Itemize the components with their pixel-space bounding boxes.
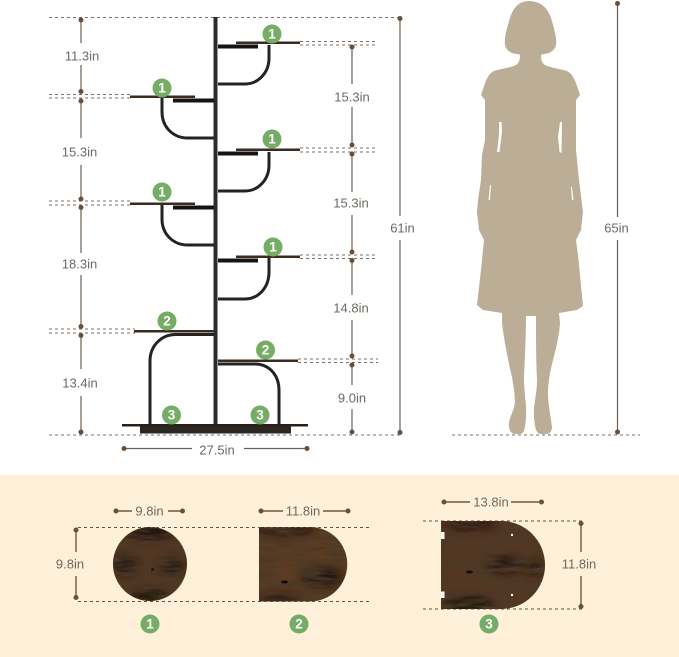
badges: stand part numbers: 3 [168,408,176,422]
dimensions: left column: 15.3in [62,144,97,160]
panel: shelf 3 base [441,494,596,634]
base shelf [122,424,308,434]
dimensions: left column [62,18,99,434]
dimension: 9.8in width: 9.8in [135,504,164,518]
badges: stand part numbers: 2 [262,342,269,358]
dimensions: right column: 9.0in [338,390,366,406]
shelf: tier 2 left [130,96,214,138]
dimension: 13.8in: 13.8in [473,494,509,510]
dimension: total height 61in: 61in [390,220,415,236]
badge 1: 1 [146,616,154,632]
dimension: 13.8in [442,494,544,510]
chart: plant stand [122,17,308,434]
dimension: total width 27.5in: 27.5in [199,442,235,458]
dimensions: left column: 18.3in [62,256,97,272]
badges: stand part numbers [152,24,282,424]
shelf: tier 5 right [218,256,300,299]
shelf: tier 3 right [218,148,300,191]
panel: shelf 2 rounded top [255,504,351,634]
badge 3 [480,614,498,634]
dimension: total height 61in [390,16,415,435]
dimensions: right column [333,44,370,434]
dimension: 9.800in height: 9.8in [56,556,84,572]
badges: stand part numbers: 3 [256,408,264,422]
dimensions: right column: 14.8in [333,300,369,316]
dimension: 11.800in height: 11.8in [562,556,596,572]
shelf: tier 6 left [134,330,214,425]
badges: stand part numbers: 1 [269,240,277,254]
dimensions: right column: 15.3in [334,90,370,104]
badges: stand part numbers: 1 [158,80,166,96]
panel: shelf 1 round top [56,504,190,634]
badges: stand part numbers: 2 [163,314,171,328]
background panel: cream footer [0,475,679,657]
badges: stand part numbers: 1 [268,26,276,42]
silhouette gaps between arms and body [488,122,574,200]
dimension: 11.800in height [562,521,596,609]
badges: stand part numbers: 1 [268,132,276,146]
guide lines: stand levels [49,18,400,435]
shelf: tier 1 right [218,42,300,84]
person silhouette [477,1,583,434]
dimension: person height 65in [452,1,640,435]
badge 3: 3 [485,616,493,632]
dimensions: left column: 11.3in [65,48,99,64]
dimensions: right column: 15.3in [333,196,369,210]
dimension: total width 27.5in [122,442,310,458]
dimension: 11.8in: 11.8in [286,504,320,518]
shelf: tier 4 left [130,202,214,245]
dimension: person height 65in: 65in [604,220,629,236]
guide lines: bottom shelves [78,521,583,609]
shelf: tier 7 right [218,360,298,425]
stand pole [214,17,218,426]
badges: stand part numbers: 1 [158,184,166,200]
shelf notches and holes [441,532,513,598]
badge 2: 2 [295,616,303,632]
dimensions: left column: 13.4in [62,376,98,390]
